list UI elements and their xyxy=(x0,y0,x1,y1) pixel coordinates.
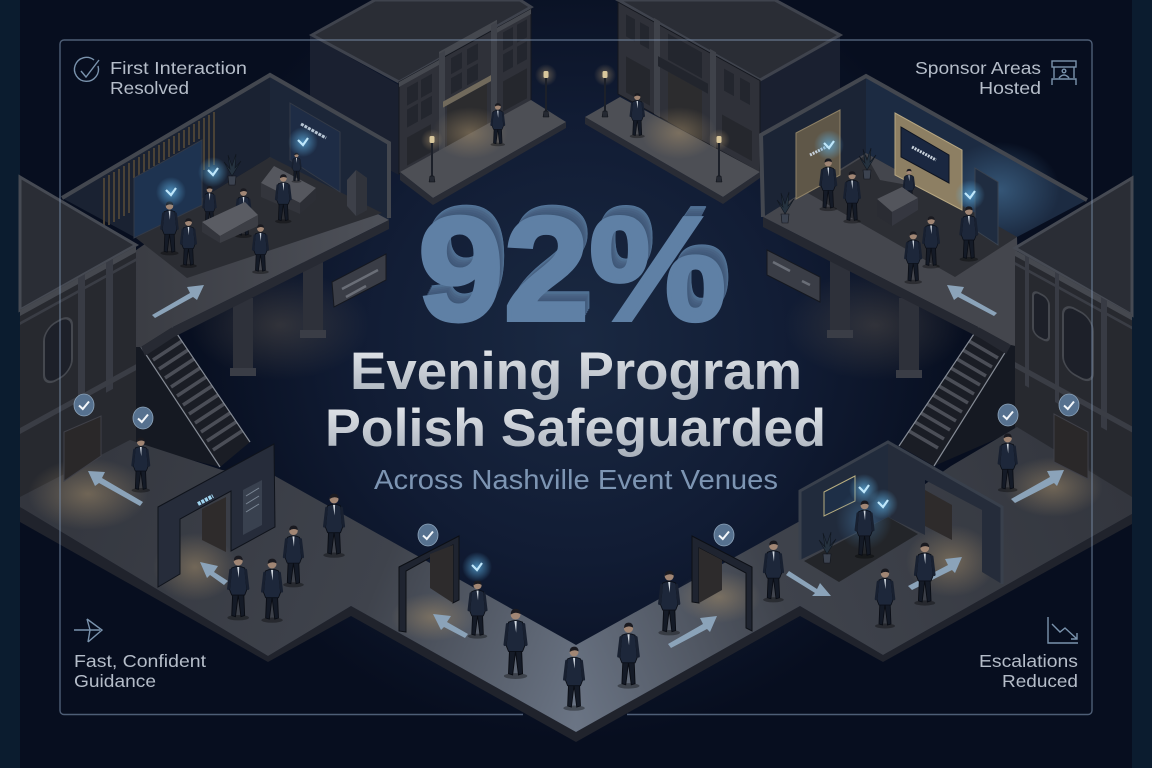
callout: first interaction: First Interaction xyxy=(110,58,247,78)
panel: first interaction room xyxy=(62,75,389,356)
icon: sponsor booth xyxy=(1052,61,1076,85)
sidewalk staff xyxy=(491,93,645,146)
dark walls behind stairs xyxy=(130,340,1017,467)
arrows: walkway xyxy=(88,470,1064,648)
walkway staff xyxy=(132,433,1018,711)
right entry door xyxy=(1054,414,1088,479)
callout: first interaction xyxy=(110,58,247,98)
reception desk xyxy=(261,166,316,214)
title: Polish Safeguarded xyxy=(325,399,826,458)
plants xyxy=(777,148,876,223)
plant xyxy=(224,154,241,185)
icon: declining chart xyxy=(1048,617,1078,643)
info panel xyxy=(975,168,998,245)
callout: sponsor areas: Sponsor Areas xyxy=(915,58,1041,78)
upper-left venue building xyxy=(310,0,566,205)
upper-right venue building xyxy=(585,0,840,204)
stairs: left xyxy=(141,325,250,467)
left building xyxy=(20,177,136,510)
door frame left xyxy=(399,536,459,632)
title xyxy=(325,342,826,458)
icon: arrow xyxy=(74,619,102,642)
callout: escalations xyxy=(979,651,1078,691)
pillars and signs under right room xyxy=(767,250,922,378)
checks xyxy=(156,127,318,207)
people by panels xyxy=(819,158,915,224)
callout: escalations: Reduced xyxy=(1002,671,1078,691)
kiosk xyxy=(347,170,367,216)
lower walkway floor xyxy=(20,427,1132,742)
underside glow xyxy=(190,270,965,380)
headline: 92%: 92% xyxy=(418,187,726,352)
panel: sponsor room xyxy=(761,76,1087,354)
people at front xyxy=(904,206,978,284)
callout: fast guidance: Guidance xyxy=(74,671,156,691)
people at room left xyxy=(160,186,252,268)
callout: fast guidance xyxy=(74,651,206,691)
verified badges xyxy=(74,394,1079,582)
wall screen xyxy=(134,140,202,238)
wood slat wall xyxy=(104,112,214,228)
front desk xyxy=(202,202,258,243)
street lamps xyxy=(421,64,730,182)
door frame right xyxy=(692,536,752,631)
sign panel xyxy=(290,103,340,192)
pillars and signs under left room xyxy=(230,254,386,376)
callout: escalations: Escalations xyxy=(979,651,1078,671)
callout: sponsor areas xyxy=(915,58,1041,98)
sponsor desk xyxy=(877,187,918,226)
checks xyxy=(814,130,985,210)
callout: first interaction: Resolved xyxy=(110,78,189,98)
callout: sponsor areas: Hosted xyxy=(979,78,1041,98)
title: Evening Program xyxy=(350,342,802,401)
right building xyxy=(1015,178,1132,509)
left entry door xyxy=(64,416,101,481)
callout: fast guidance: Fast, Confident xyxy=(74,651,206,671)
frame xyxy=(60,40,1092,714)
subtitle: Across Nashville Event Venues xyxy=(374,464,778,495)
gold sponsor panels xyxy=(796,110,962,210)
partition wall left xyxy=(158,444,275,587)
booth room right xyxy=(800,442,1002,584)
stairs: right xyxy=(899,325,1011,466)
icon: check circle xyxy=(74,57,99,81)
arrows: upper floors xyxy=(152,285,997,318)
visitor xyxy=(252,224,269,274)
desk staff xyxy=(275,153,302,223)
